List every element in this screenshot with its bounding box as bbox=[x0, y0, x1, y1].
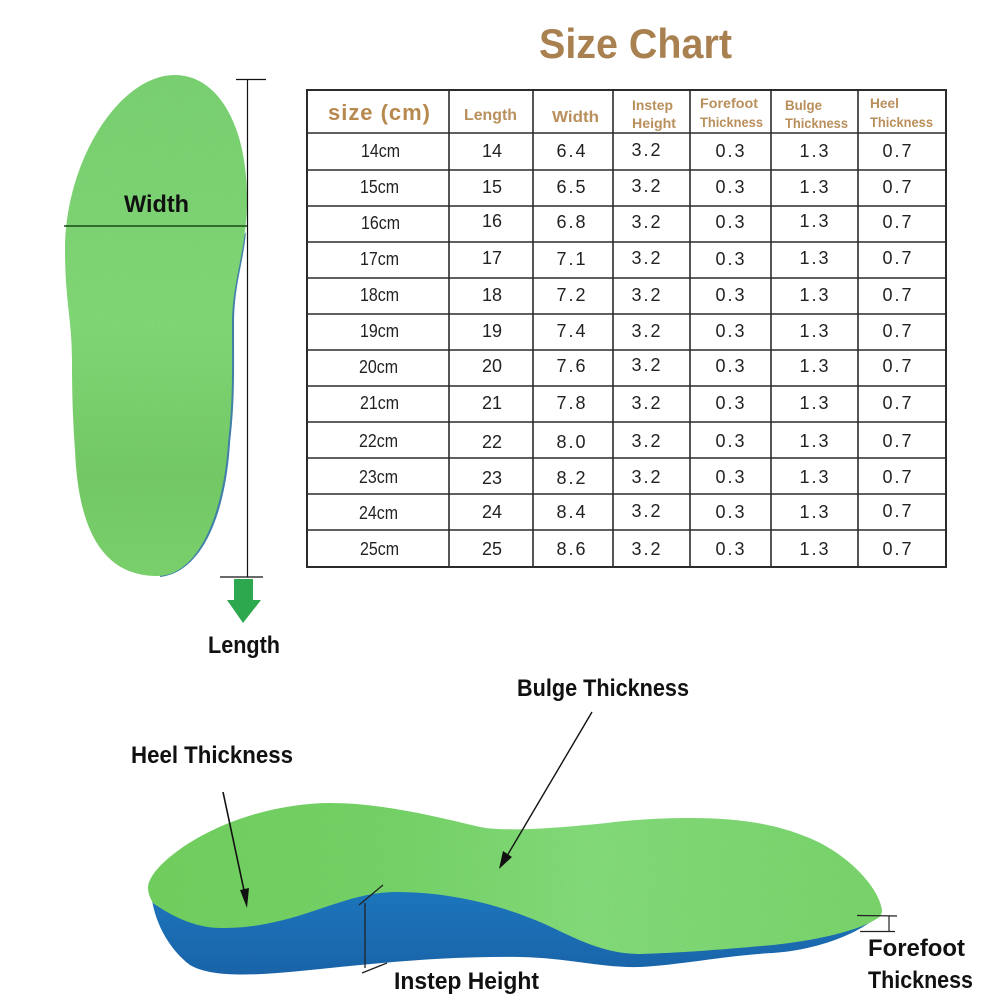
table row 24cm bbox=[359, 501, 914, 523]
table row 24cm: 24cm bbox=[359, 503, 398, 523]
insole surface texture bbox=[60, 70, 250, 580]
table row 21cm: 3.2 bbox=[631, 393, 663, 413]
bulge thickness label: Bulge Thickness bbox=[517, 675, 689, 702]
table row 17cm: 1.3 bbox=[799, 248, 831, 268]
table header row: Bulge bbox=[785, 97, 822, 113]
table row 21cm: 0.7 bbox=[882, 393, 914, 413]
table row 15cm: 15 bbox=[482, 177, 502, 197]
table row 22cm: 0.3 bbox=[715, 431, 747, 451]
table row 20cm: 7.6 bbox=[556, 356, 588, 376]
table row 17cm: 0.7 bbox=[882, 248, 914, 268]
table row 19cm: 1.3 bbox=[799, 321, 831, 341]
table row 25cm: 1.3 bbox=[799, 539, 831, 559]
table row 23cm: 23cm bbox=[359, 467, 398, 487]
table header row: Thickness bbox=[785, 115, 848, 131]
length measure line bbox=[220, 79, 266, 577]
title: Size Chart bbox=[539, 20, 732, 67]
table row 20cm: 20 bbox=[482, 356, 502, 376]
table row 22cm: 22 bbox=[482, 432, 502, 452]
table row 17cm bbox=[360, 248, 914, 269]
forefoot thickness marker bbox=[857, 916, 897, 932]
table row 24cm: 24 bbox=[482, 502, 502, 522]
heel thickness label: Heel Thickness bbox=[131, 742, 293, 769]
table row 24cm: 0.3 bbox=[715, 502, 747, 522]
table row 20cm bbox=[359, 355, 914, 377]
table row 25cm: 0.7 bbox=[882, 539, 914, 559]
table row 17cm: 3.2 bbox=[631, 248, 663, 268]
table row 21cm bbox=[360, 393, 914, 413]
forefoot thickness label: Forefoot bbox=[868, 935, 965, 962]
table row 18cm: 0.7 bbox=[882, 285, 914, 305]
table header row bbox=[328, 95, 933, 131]
table row 20cm: 20cm bbox=[359, 357, 398, 377]
table row 17cm: 0.3 bbox=[715, 249, 747, 269]
table row 16cm: 0.3 bbox=[715, 212, 747, 232]
top-view insole bbox=[60, 70, 250, 580]
table row 19cm: 19cm bbox=[360, 321, 399, 341]
table row 14cm: 0.3 bbox=[715, 141, 747, 161]
table row 17cm: 17 bbox=[482, 248, 502, 268]
table row 19cm: 7.4 bbox=[556, 321, 588, 341]
table header row: Thickness bbox=[870, 114, 933, 130]
table row 23cm: 0.3 bbox=[715, 467, 747, 487]
width label: Width bbox=[124, 191, 189, 218]
table grid bbox=[307, 90, 946, 567]
table row 14cm: 0.7 bbox=[882, 141, 914, 161]
table row 16cm: 3.2 bbox=[631, 212, 663, 232]
table row 22cm: 22cm bbox=[359, 431, 398, 451]
table row 18cm bbox=[360, 285, 914, 305]
table row 25cm: 25cm bbox=[360, 539, 399, 559]
table row 14cm: 3.2 bbox=[631, 140, 663, 160]
table row 14cm: 14cm bbox=[361, 141, 400, 161]
table row 14cm bbox=[361, 140, 914, 161]
table row 19cm: 19 bbox=[482, 321, 502, 341]
table header row: Thickness bbox=[700, 114, 763, 130]
table row 15cm: 15cm bbox=[360, 177, 399, 197]
blue edge of insole bbox=[150, 232, 246, 577]
table row 18cm: 18 bbox=[482, 285, 502, 305]
forefoot thickness label bbox=[868, 935, 973, 994]
table row 16cm: 0.7 bbox=[882, 212, 914, 232]
table row 18cm: 18cm bbox=[360, 285, 399, 305]
blue shell bbox=[152, 885, 882, 975]
table header row: Heel bbox=[870, 95, 899, 111]
table row 25cm: 3.2 bbox=[631, 539, 663, 559]
table row 22cm: 3.2 bbox=[631, 431, 663, 451]
table row 15cm: 0.3 bbox=[715, 177, 747, 197]
table row 14cm: 14 bbox=[482, 141, 502, 161]
table row 21cm: 21cm bbox=[360, 393, 399, 413]
table row 21cm: 21 bbox=[482, 393, 502, 413]
table row 25cm: 25 bbox=[482, 539, 502, 559]
side surface texture bbox=[552, 826, 674, 948]
table row 24cm: 3.2 bbox=[631, 501, 663, 521]
table row 20cm: 0.7 bbox=[882, 356, 914, 376]
table row 22cm bbox=[359, 431, 914, 452]
arrow: bulge thickness bbox=[499, 712, 592, 869]
table row 24cm: 0.7 bbox=[882, 501, 914, 521]
table row 23cm: 3.2 bbox=[631, 467, 663, 487]
table row 20cm: 1.3 bbox=[799, 356, 831, 376]
table row 23cm bbox=[359, 467, 914, 488]
forefoot thickness label: Thickness bbox=[868, 967, 973, 994]
icon: green down arrow bbox=[227, 579, 261, 623]
size chart table bbox=[307, 90, 946, 567]
table row 24cm: 1.3 bbox=[799, 502, 831, 522]
table row 22cm: 0.7 bbox=[882, 431, 914, 451]
table row 18cm: 1.3 bbox=[799, 285, 831, 305]
insole upper surface bbox=[65, 75, 247, 576]
table row 16cm: 16 bbox=[482, 211, 502, 231]
table row 15cm: 0.7 bbox=[882, 177, 914, 197]
table row 23cm: 23 bbox=[482, 468, 502, 488]
table row 23cm: 8.2 bbox=[556, 468, 588, 488]
table header row: Instep bbox=[632, 97, 673, 113]
table header row: Length bbox=[464, 107, 517, 124]
table row 25cm: 0.3 bbox=[715, 539, 747, 559]
table row 16cm bbox=[361, 211, 914, 233]
length label: Length bbox=[208, 632, 280, 659]
arrow: heel thickness bbox=[223, 792, 249, 908]
table row 15cm bbox=[360, 176, 914, 197]
table row 15cm: 6.5 bbox=[556, 177, 588, 197]
table row 21cm: 0.3 bbox=[715, 393, 747, 413]
instep height marker bbox=[359, 885, 387, 973]
table row 23cm: 0.7 bbox=[882, 467, 914, 487]
side-view insole bbox=[145, 800, 885, 975]
table header row: size (cm) bbox=[328, 100, 430, 125]
table row 20cm: 3.2 bbox=[631, 355, 663, 375]
table row 19cm: 3.2 bbox=[631, 321, 663, 341]
table row 14cm: 1.3 bbox=[799, 141, 831, 161]
table row 25cm bbox=[360, 539, 914, 559]
table row 15cm: 3.2 bbox=[631, 176, 663, 196]
table row 25cm: 8.6 bbox=[556, 539, 588, 559]
width measure line bbox=[64, 225, 247, 227]
table row 18cm: 0.3 bbox=[715, 285, 747, 305]
table row 16cm: 16cm bbox=[361, 213, 400, 233]
table header row: Height bbox=[632, 115, 676, 131]
green upper surface bbox=[148, 803, 882, 954]
table row 22cm: 8.0 bbox=[556, 432, 588, 452]
table row 23cm: 1.3 bbox=[799, 467, 831, 487]
table row 17cm: 17cm bbox=[360, 249, 399, 269]
table row 24cm: 8.4 bbox=[556, 502, 588, 522]
table row 19cm bbox=[360, 321, 914, 341]
table row 19cm: 0.7 bbox=[882, 321, 914, 341]
table row 19cm: 0.3 bbox=[715, 321, 747, 341]
table row 16cm: 6.8 bbox=[556, 212, 588, 232]
table row 18cm: 7.2 bbox=[556, 285, 588, 305]
table row 20cm: 0.3 bbox=[715, 356, 747, 376]
table row 21cm: 1.3 bbox=[799, 393, 831, 413]
table row 22cm: 1.3 bbox=[799, 431, 831, 451]
table row 14cm: 6.4 bbox=[556, 141, 588, 161]
table row 15cm: 1.3 bbox=[799, 177, 831, 197]
table header row: Width bbox=[552, 109, 599, 126]
table row 21cm: 7.8 bbox=[556, 393, 588, 413]
table header row: Forefoot bbox=[700, 95, 758, 111]
table row 17cm: 7.1 bbox=[556, 249, 588, 269]
table row 16cm: 1.3 bbox=[799, 211, 831, 231]
table row 18cm: 3.2 bbox=[631, 285, 663, 305]
instep height label: Instep Height bbox=[394, 968, 539, 995]
